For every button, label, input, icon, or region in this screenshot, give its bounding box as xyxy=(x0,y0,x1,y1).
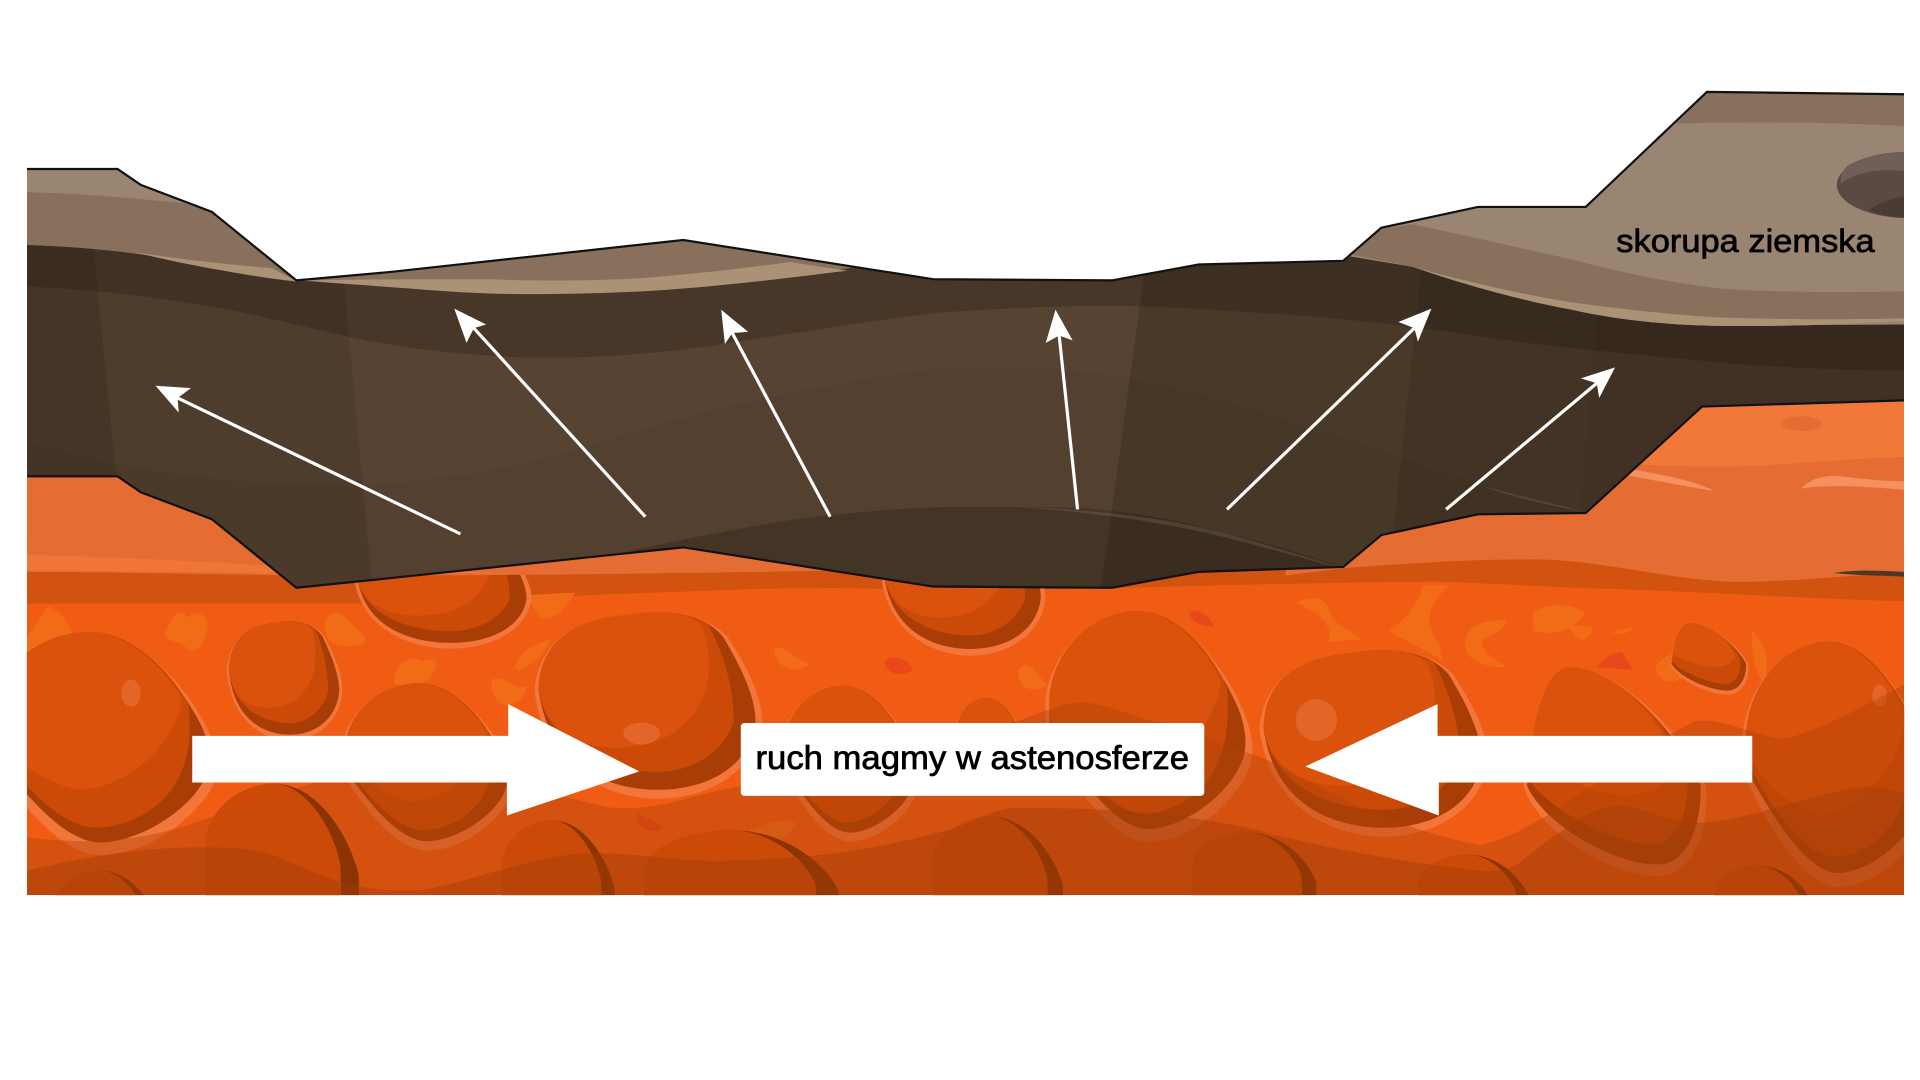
icon: rock cavity xyxy=(1837,152,1920,218)
blob: right xyxy=(1523,667,1706,876)
asthenosphere background xyxy=(27,582,1904,896)
light streak left xyxy=(27,555,514,573)
deep dark mound xyxy=(612,507,1340,600)
blob: under crust centre xyxy=(882,580,1046,656)
mound light edge xyxy=(1016,507,1347,571)
blob: centre-left lower xyxy=(342,683,513,851)
blob: large right of label xyxy=(1259,650,1488,837)
blob: lower right of label xyxy=(1192,832,1316,896)
arrow: thin up-right 5 xyxy=(1227,309,1431,509)
arrow: large left-pointing magma flow xyxy=(1305,704,1752,816)
vertical rock panels xyxy=(27,244,1904,587)
label: magma movement: ruch magmy w astenosferze xyxy=(756,740,1189,777)
dark streak xyxy=(1833,571,1904,577)
lithosphere outline bottom xyxy=(27,400,1904,588)
blob: large centre-right xyxy=(1045,611,1252,842)
arrow: thin up-left 2 xyxy=(454,309,645,517)
magma blobs: upper row xyxy=(0,516,1920,887)
arrow: large right-pointing magma flow xyxy=(192,704,639,816)
blob: large far right xyxy=(1742,642,1920,887)
arrow: thin up-right 6 xyxy=(1446,367,1615,509)
blob: behind label left xyxy=(781,686,920,841)
right crust light strip xyxy=(1413,267,1904,326)
label: earth crust: skorupa ziemska xyxy=(1616,223,1876,259)
light edge right xyxy=(1479,485,1587,512)
magma blobs: lower row xyxy=(55,784,1808,896)
arrow: thin up 4 xyxy=(1046,310,1078,509)
arrow: thin up-left 3 xyxy=(721,310,830,517)
blob: under crust left xyxy=(355,574,532,649)
crust left xyxy=(27,159,298,282)
right crust top band xyxy=(1676,92,1904,126)
blob: lower far right xyxy=(1714,866,1808,896)
upper translucent magma wave xyxy=(27,684,1904,895)
lithosphere outline top xyxy=(27,92,1904,280)
upper asthenosphere layer right xyxy=(1286,398,1904,582)
lithosphere dark layer xyxy=(27,73,1920,600)
blob: large centre-left xyxy=(534,612,762,799)
upper dark band xyxy=(27,233,1904,371)
blob: lower left xyxy=(206,784,359,896)
red magma specks xyxy=(637,610,1633,831)
crust right xyxy=(1347,92,1920,326)
lighter top of right layer xyxy=(1641,402,1904,466)
blob: lower centre-right xyxy=(933,816,1063,896)
label: magma movement xyxy=(741,723,1204,796)
blob: small behind label xyxy=(957,698,1017,723)
subtle mid band xyxy=(27,367,1578,600)
blob: small left xyxy=(227,621,342,740)
spot xyxy=(1780,416,1822,431)
panel: geological cross-section xyxy=(26,90,1904,896)
dark magma band xyxy=(27,560,1904,604)
right crust mid brown lower xyxy=(1352,224,1904,326)
magma swirl specks xyxy=(27,585,1767,850)
blob highlights xyxy=(121,680,1887,744)
blob: large far left xyxy=(26,632,214,855)
lower translucent magma wave xyxy=(27,787,1904,895)
blob: lower far left xyxy=(55,870,144,896)
blob: lower centre-left xyxy=(502,820,615,896)
upper asthenosphere layer left xyxy=(27,477,825,576)
light streaks xyxy=(1626,469,1714,491)
blob: lower centre xyxy=(644,830,839,896)
arrow: thin up-left 1 xyxy=(156,386,460,534)
blob: lower right xyxy=(1418,854,1528,896)
blob: small right xyxy=(1670,623,1749,695)
crust centre xyxy=(296,240,857,294)
